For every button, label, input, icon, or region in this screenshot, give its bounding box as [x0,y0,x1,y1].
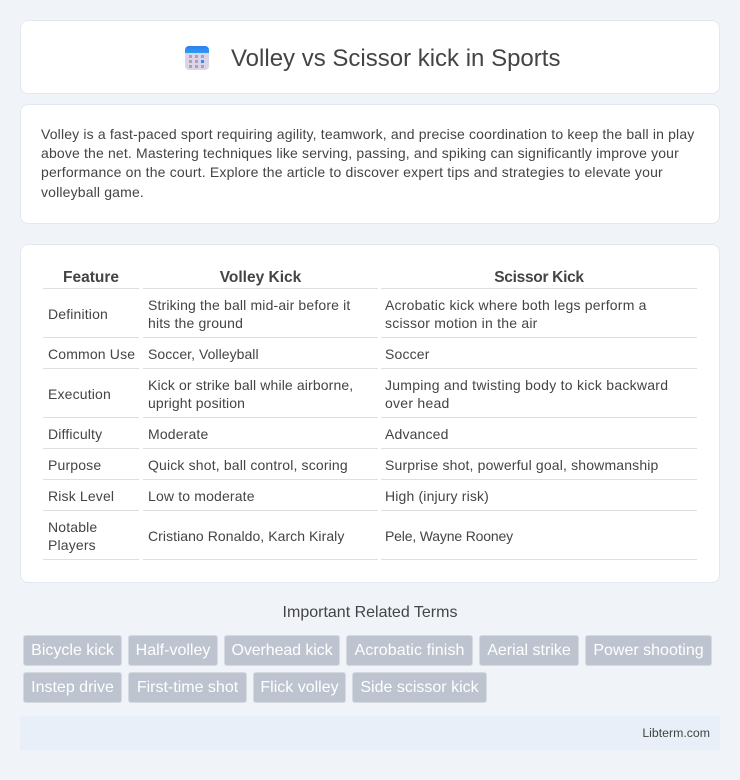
tag [224,635,340,666]
Notable Players, scissor: Pele, Wayne Rooney [385,528,513,544]
tag: Acrobatic finish [354,642,465,659]
Purpose, scissor: Surprise shot, powerful goal, showmanship [385,457,658,473]
Definition, scissor: scissor motion in the air [385,315,538,331]
row: Risk Level: Risk Level [48,488,114,504]
Risk Level, scissor: High (injury risk) [385,488,489,504]
tag [585,635,712,666]
tag: Instep drive [31,679,114,696]
row: Purpose: Purpose [48,457,101,473]
tag [128,672,247,703]
column header: Volley Kick: Volley Kick [220,269,301,286]
panel: title card [20,20,720,94]
Execution, scissor: Jumping and twisting body to kick backward [385,377,668,393]
Execution, scissor: over head [385,395,450,411]
Notable Players, volley: Cristiano Ronaldo, Karch Kiraly [148,528,344,544]
tag: Power shooting [593,642,704,659]
intro line 4: volleyball game. [41,184,144,200]
intro line 1: Volley is a fast-paced sport requiring agility, teamwork, and precise coordination to keep the ball in play [41,126,694,142]
tag [23,672,122,703]
Execution, volley: upright position [148,395,245,411]
Difficulty, volley: Moderate [148,426,208,442]
tag [352,672,487,703]
Definition, volley [148,297,350,331]
footer bar [20,716,720,750]
footer credit: Libterm.com [642,726,710,740]
tag list [23,635,712,703]
tag: First-time shot [137,679,238,696]
panel: comparison table [20,244,720,583]
comparison table contents [43,269,697,560]
panel: intro paragraph [20,104,720,224]
tag: Side scissor kick [360,679,479,696]
icon: calendar [185,46,209,70]
Execution, scissor [385,377,668,411]
tag [253,672,346,703]
Definition, volley: hits the ground [148,315,243,331]
Execution, volley [148,377,353,411]
row: Notable Players [48,519,97,553]
Difficulty, scissor: Advanced [385,426,449,442]
Risk Level, volley: Low to moderate [148,488,255,504]
title: Volley vs Scissor kick in Sports [231,45,560,72]
Definition, scissor: Acrobatic kick where both legs perform a [385,297,647,313]
Common Use, volley: Soccer, Volleyball [148,346,259,362]
row: Difficulty: Difficulty [48,426,102,442]
row: Common Use: Common Use [48,346,135,362]
tag: Flick volley [260,679,339,696]
tag: Aerial strike [487,642,571,659]
intro line 3: performance on the court. Explore the article to discover expert tips and strategies to elevate your [41,164,663,180]
Definition, volley: Striking the ball mid-air before it [148,297,350,313]
column header: Scissor Kick: Scissor Kick [494,269,584,286]
row: Notable Players: Players [48,537,96,553]
row: Notable Players: Notable [48,519,97,535]
intro line 2: above the net. Mastering techniques like serving, passing, and spiking can significantly improve your [41,145,679,161]
Common Use, scissor: Soccer [385,346,430,362]
Purpose, volley: Quick shot, ball control, scoring [148,457,348,473]
Execution, volley: Kick or strike ball while airborne, [148,377,353,393]
tag: Half-volley [136,642,210,659]
Definition, scissor [385,297,647,331]
tag: Overhead kick [232,642,332,659]
tag: Bicycle kick [31,642,114,659]
row: Execution: Execution [48,386,111,402]
row: Definition: Definition [48,306,108,322]
tag [346,635,473,666]
column header: Feature: Feature [63,269,119,286]
tag [23,635,122,666]
heading: related terms: Important Related Terms [283,604,457,621]
tag [128,635,218,666]
tag [479,635,579,666]
